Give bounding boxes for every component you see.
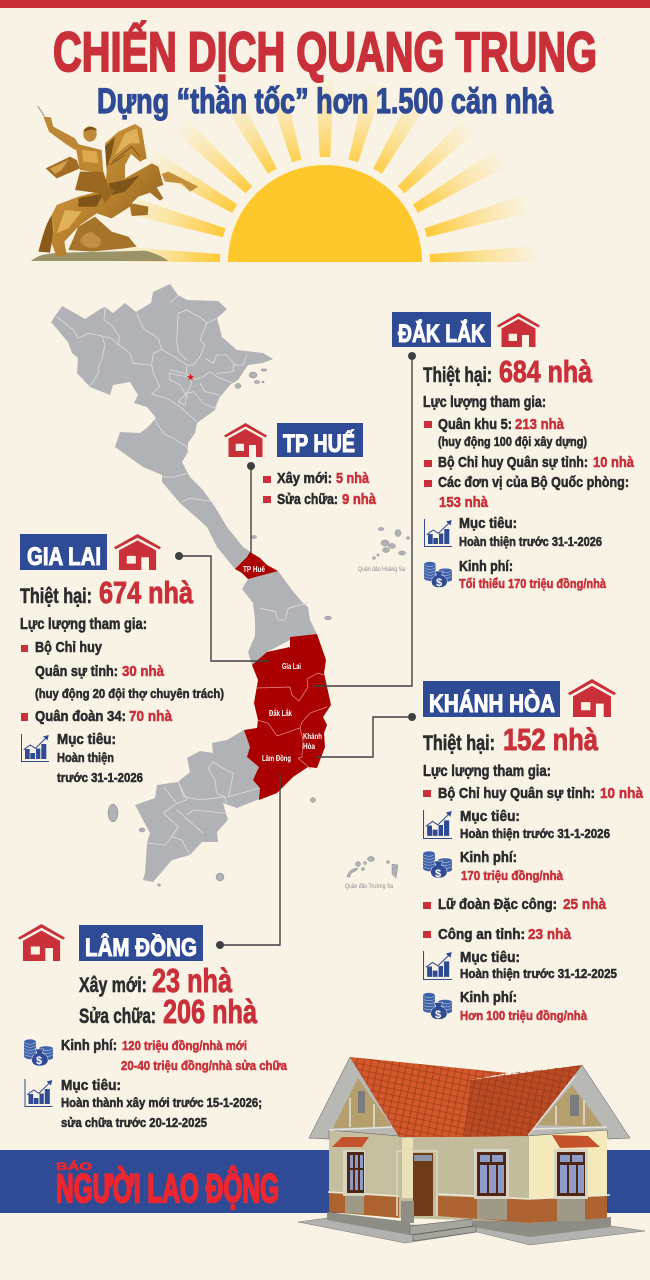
newspaper logo — [56, 1160, 279, 1211]
forces heading: Lực lượng tham gia: — [423, 394, 546, 411]
heading badge — [423, 681, 560, 718]
icon: chart — [424, 519, 452, 546]
map label: Lam Dong: Lâm Đồng — [262, 754, 291, 763]
top bar — [0, 0, 650, 8]
map of Vietnam — [51, 284, 410, 890]
connector: Lam Dong — [216, 773, 280, 949]
icon: coins: $ — [435, 1009, 441, 1021]
forces list — [21, 639, 224, 725]
map label: TP Hue: TP Huế — [243, 565, 265, 574]
central region — [242, 570, 317, 665]
heading badge: ĐẮK LẮK — [398, 318, 485, 348]
unit: provincial command: 10 nhà — [600, 785, 644, 802]
damage: 684 nhà — [499, 354, 593, 389]
repairs: Sửa chữa: — [79, 1005, 156, 1028]
target: Mục tiêu: — [460, 808, 520, 825]
forces list: Quân đoàn 34: — [35, 708, 126, 725]
porch column — [402, 1138, 413, 1198]
icon: coins — [423, 851, 452, 880]
icon: chart — [424, 810, 452, 838]
budget — [61, 1037, 288, 1073]
walls — [329, 1130, 399, 1212]
damage — [423, 722, 599, 757]
target: Mục tiêu: — [61, 1077, 121, 1094]
repairs: 206 nhà — [163, 993, 257, 1030]
Paracel and Spratly islands, coastal islands — [108, 369, 410, 886]
panel: Lam Dong — [18, 924, 288, 1130]
list: Xây mới: — [277, 470, 332, 487]
icon: house — [18, 924, 65, 961]
budget: Kinh phí: — [459, 558, 513, 575]
province borders north — [57, 295, 247, 502]
damage: Thiệt hại: — [423, 732, 495, 755]
icon: coins — [423, 993, 452, 1021]
map label: Hoa: Hòa — [303, 742, 315, 751]
ground slab — [298, 1218, 645, 1245]
sun with rays — [110, 62, 540, 367]
icon: house — [114, 534, 161, 570]
target: Mục tiêu: — [460, 949, 520, 966]
list: Sửa chữa: — [277, 491, 338, 508]
icon: coins: $ — [436, 577, 442, 589]
connector: Gia Lai — [175, 552, 269, 661]
heading badge: LÂM ĐỒNG — [85, 932, 197, 962]
target — [460, 949, 617, 981]
forces list: 153 nhà — [439, 494, 489, 511]
panel: Dak Lak — [392, 312, 635, 591]
heading badge — [392, 312, 491, 348]
target — [57, 731, 143, 785]
target: Hoàn thiện trước 31-1-2026 — [459, 534, 602, 549]
target — [459, 515, 602, 549]
list: 9 nhà — [342, 491, 377, 508]
icon: chart — [22, 734, 49, 762]
target: trước 31-1-2026 — [57, 770, 143, 785]
connector: Dak Lak — [313, 352, 416, 686]
statue of Quang Trung on horse — [31, 106, 198, 261]
brick band — [329, 1193, 607, 1223]
label: Truong Sa: Quần đảo Trường Sa — [345, 881, 393, 890]
forces list: Bộ Chỉ huy — [35, 639, 103, 656]
budget: 170 triệu đồng/nhà — [461, 868, 564, 883]
connector: TP Hue — [247, 462, 255, 553]
icon: chart — [25, 1079, 52, 1106]
target: Hoàn thành xây mới trước 15-1-2026; — [61, 1095, 262, 1110]
forces list: (huy động 20 đội thợ chuyên trách) — [35, 687, 224, 701]
heading badge: TP HUẾ — [283, 429, 355, 458]
target — [460, 808, 610, 841]
budget — [460, 849, 564, 883]
door surround — [397, 1151, 437, 1216]
target: sửa chữa trước 20-12-2025 — [61, 1115, 207, 1130]
unit: provincial police — [423, 926, 572, 943]
forces list: 30 nhà — [122, 663, 165, 680]
steps — [410, 1219, 476, 1241]
target — [61, 1077, 262, 1130]
icon: house — [224, 423, 267, 457]
forces list: (huy động 100 đội xây dựng) — [438, 435, 587, 449]
forces list: Bộ Chỉ huy Quân sự tỉnh: — [438, 454, 588, 471]
map label: Dak Lak: Đắk Lắk — [269, 709, 292, 718]
target: Hoàn thiện — [57, 750, 114, 765]
budget: Kinh phí: — [460, 989, 517, 1006]
heading badge — [79, 925, 203, 962]
footer band — [0, 1150, 650, 1213]
list: 5 nhà — [336, 470, 370, 487]
damage: 152 nhà — [503, 722, 599, 757]
icon: coins: $ — [36, 1055, 42, 1067]
windows — [343, 1149, 588, 1199]
gables — [309, 1057, 399, 1139]
unit: provincial command: Bộ Chỉ huy Quân sự tỉnh: — [438, 785, 595, 802]
forces heading: Lực lượng tham gia: — [423, 763, 551, 780]
red provinces — [244, 634, 331, 800]
map label: Gia Lai: Gia Lai — [282, 662, 301, 671]
damage — [423, 354, 593, 389]
icon: house — [568, 679, 616, 717]
target: Mục tiêu: — [57, 731, 116, 748]
damage: 674 nhà — [99, 575, 194, 610]
newspaper logo: BÁO — [56, 1160, 93, 1173]
budget: 120 triệu đồng/nhà mới — [122, 1038, 247, 1053]
forces list: 10 nhà — [593, 454, 635, 471]
forces list: Quân khu 5: — [438, 416, 512, 433]
damage — [20, 575, 194, 610]
label: Hoang Sa: Quần đảo Hoàng Sa — [358, 564, 405, 573]
map label: Khanh Hoa: Khánh — [303, 732, 322, 741]
unit: special forces: Lữ đoàn Đặc công: — [438, 896, 557, 913]
new builds — [79, 962, 232, 999]
target: Hoàn thiện trước 31-12-2025 — [460, 966, 617, 981]
icon: coins — [424, 562, 452, 589]
panel: Khanh Hoa — [423, 679, 644, 1023]
forces list: 70 nhà — [129, 708, 173, 725]
icon: chart — [424, 951, 452, 979]
province borders south — [148, 603, 308, 855]
list — [263, 470, 377, 508]
damage: Thiệt hại: — [423, 364, 492, 387]
new builds: Xây mới: — [79, 974, 147, 997]
budget: 20-40 triệu đồng/nhà sửa chữa — [121, 1058, 288, 1073]
panel: Gia Lai — [20, 534, 224, 785]
icon: coins: $ — [435, 868, 441, 880]
heading badge: GIA LAI — [27, 543, 101, 571]
heading badge — [277, 423, 363, 458]
target: Mục tiêu: — [459, 515, 517, 532]
forces list: Quân sự tỉnh: — [35, 663, 118, 680]
budget: Kinh phí: — [61, 1037, 117, 1054]
north region — [51, 284, 273, 573]
repairs — [79, 993, 257, 1030]
damage: Thiệt hại: — [20, 585, 92, 608]
unit: provincial police: 23 nhà — [528, 926, 572, 943]
south region — [135, 730, 262, 882]
awnings — [332, 1135, 600, 1148]
budget: Kinh phí: — [460, 849, 517, 866]
unit: provincial police: Công an tỉnh: — [438, 926, 525, 943]
forces list: 213 nhà — [515, 416, 565, 433]
target: Hoàn thiện trước 31-1-2026 — [460, 826, 610, 841]
door — [413, 1153, 433, 1216]
budget: Tối thiểu 170 triệu đồng/nhà — [459, 576, 607, 591]
capital star — [187, 374, 194, 380]
unit: special forces: 25 nhà — [563, 896, 607, 913]
icon: house — [497, 313, 540, 347]
panel: TP Hue — [224, 423, 377, 508]
icon: coins — [24, 1039, 53, 1067]
budget: Hơn 100 triệu đồng/nhà — [460, 1008, 588, 1023]
new builds: 23 nhà — [152, 962, 232, 999]
TP Hue region — [235, 552, 278, 579]
newspaper logo: NGƯỜI LAO ĐỘNG — [56, 1165, 279, 1211]
roof — [350, 1057, 508, 1137]
forces list — [424, 416, 635, 511]
heading badge: KHÁNH HÒA — [429, 688, 555, 718]
budget — [459, 558, 607, 591]
plinth — [327, 1212, 611, 1237]
budget — [460, 989, 588, 1023]
forces heading: Lực lượng tham gia: — [20, 616, 147, 633]
house illustration — [298, 1057, 645, 1245]
connector: Khanh Hoa — [316, 713, 416, 757]
heading badge — [20, 534, 107, 571]
